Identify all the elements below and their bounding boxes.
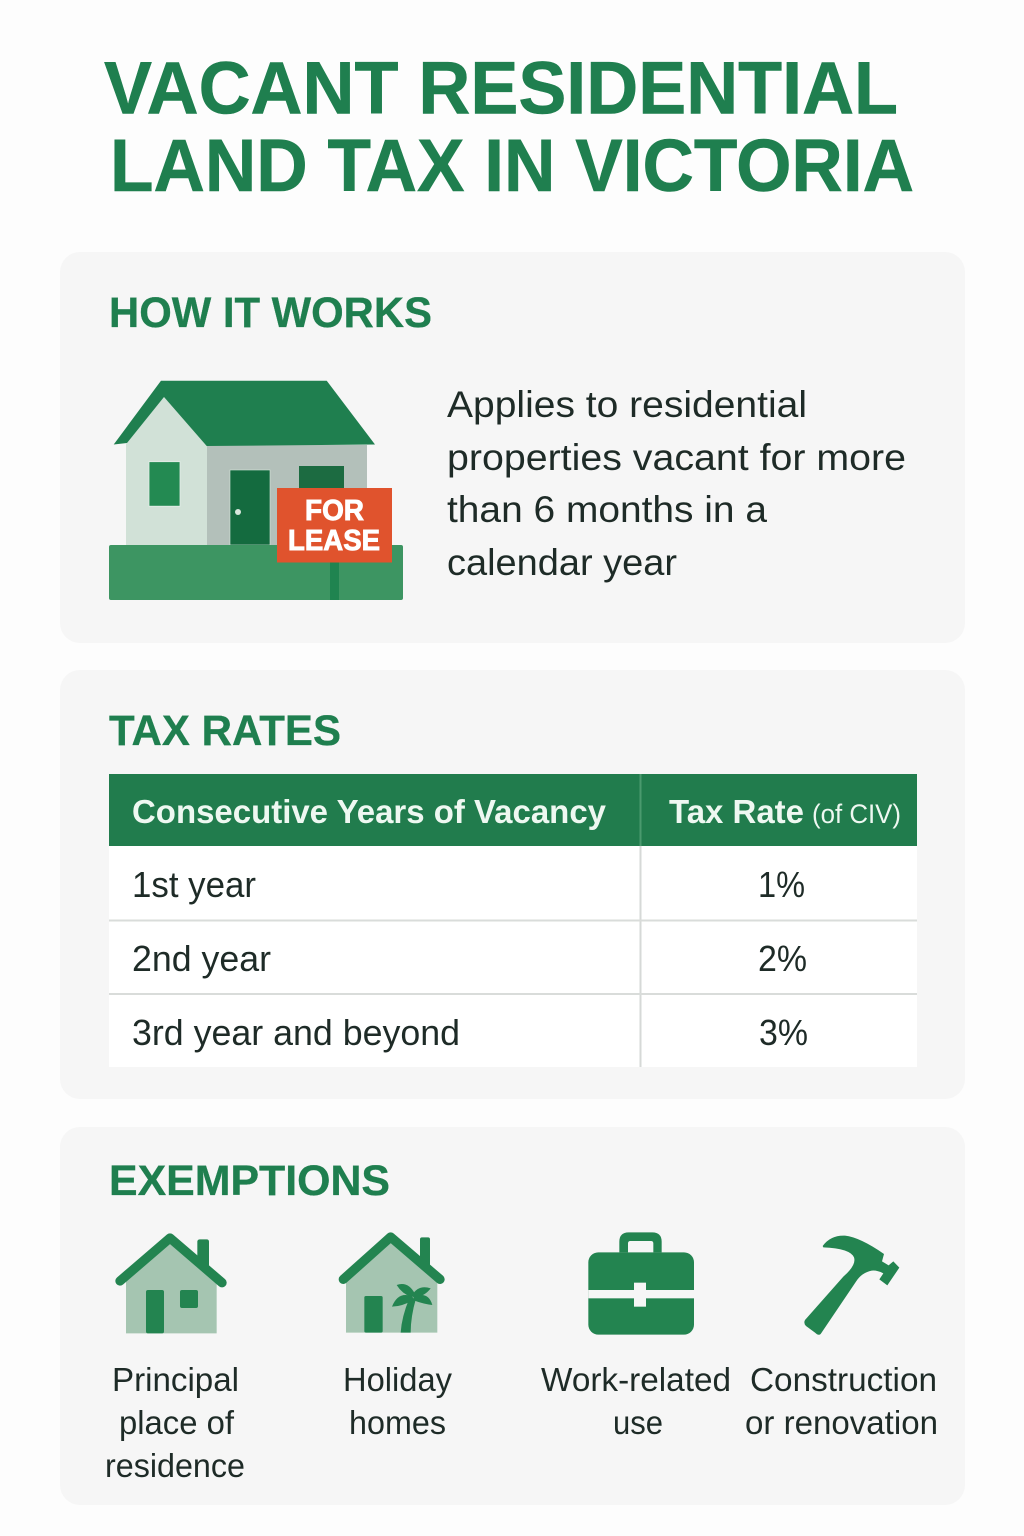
label: principal place of residence <box>105 1361 245 1484</box>
heading: how it works: HOW IT WORKS <box>109 289 432 337</box>
label: construction or renovation <box>745 1361 938 1441</box>
text block: description: than 6 months in a <box>447 489 767 530</box>
icon: principal residence house <box>120 1238 222 1333</box>
label: principal place of residence: place of <box>119 1404 235 1441</box>
table: tax rates <box>109 774 917 1067</box>
title: LAND TAX IN VICTORIA <box>110 124 914 207</box>
heading: exemptions: EXEMPTIONS <box>109 1157 390 1205</box>
icon: briefcase <box>588 1232 694 1335</box>
label: holiday homes <box>343 1361 452 1441</box>
panel: how it works <box>60 252 965 643</box>
panel: tax rates <box>60 670 965 1099</box>
table rows: 1% <box>758 864 805 905</box>
panel: exemptions <box>60 1127 965 1505</box>
table header: Consecutive Years of Vacancy <box>132 793 607 830</box>
table header: (of CIV) <box>812 799 901 829</box>
label: holiday homes: homes <box>349 1404 446 1441</box>
table rows: 1st year <box>132 864 256 905</box>
label: principal place of residence: Principal <box>112 1361 239 1398</box>
label: work-related use <box>541 1361 731 1441</box>
table header: Tax Rate <box>669 793 804 830</box>
illustration: house with for lease sign <box>109 381 403 600</box>
table rows <box>132 864 808 1053</box>
label: work-related use: Work-related <box>541 1361 731 1398</box>
text block: description: calendar year <box>447 542 677 583</box>
title <box>104 46 914 207</box>
illustration: house with for lease sign: LEASE <box>288 525 380 557</box>
title: VACANT RESIDENTIAL <box>104 46 898 130</box>
heading: tax rates: TAX RATES <box>109 707 341 755</box>
table header <box>132 793 901 830</box>
icon: holiday home with palm <box>343 1237 440 1333</box>
label: construction or renovation: or renovation <box>745 1404 938 1441</box>
text block: description: properties vacant for more <box>447 437 906 478</box>
label: principal place of residence: residence <box>105 1447 245 1484</box>
text block: description <box>447 384 906 583</box>
label: holiday homes: Holiday <box>343 1361 452 1398</box>
table rows: 3rd year and beyond <box>132 1012 460 1053</box>
palm tree <box>392 1284 432 1333</box>
table rows: 3% <box>759 1012 808 1053</box>
icon: hammer <box>804 1236 899 1335</box>
table rows: 2% <box>758 938 807 979</box>
illustration: house with for lease sign: FOR <box>305 495 364 527</box>
label: work-related use: use <box>613 1404 663 1441</box>
label: construction or renovation: Construction <box>750 1361 937 1398</box>
text block: description: Applies to residential <box>447 384 807 425</box>
table rows: 2nd year <box>132 938 271 979</box>
